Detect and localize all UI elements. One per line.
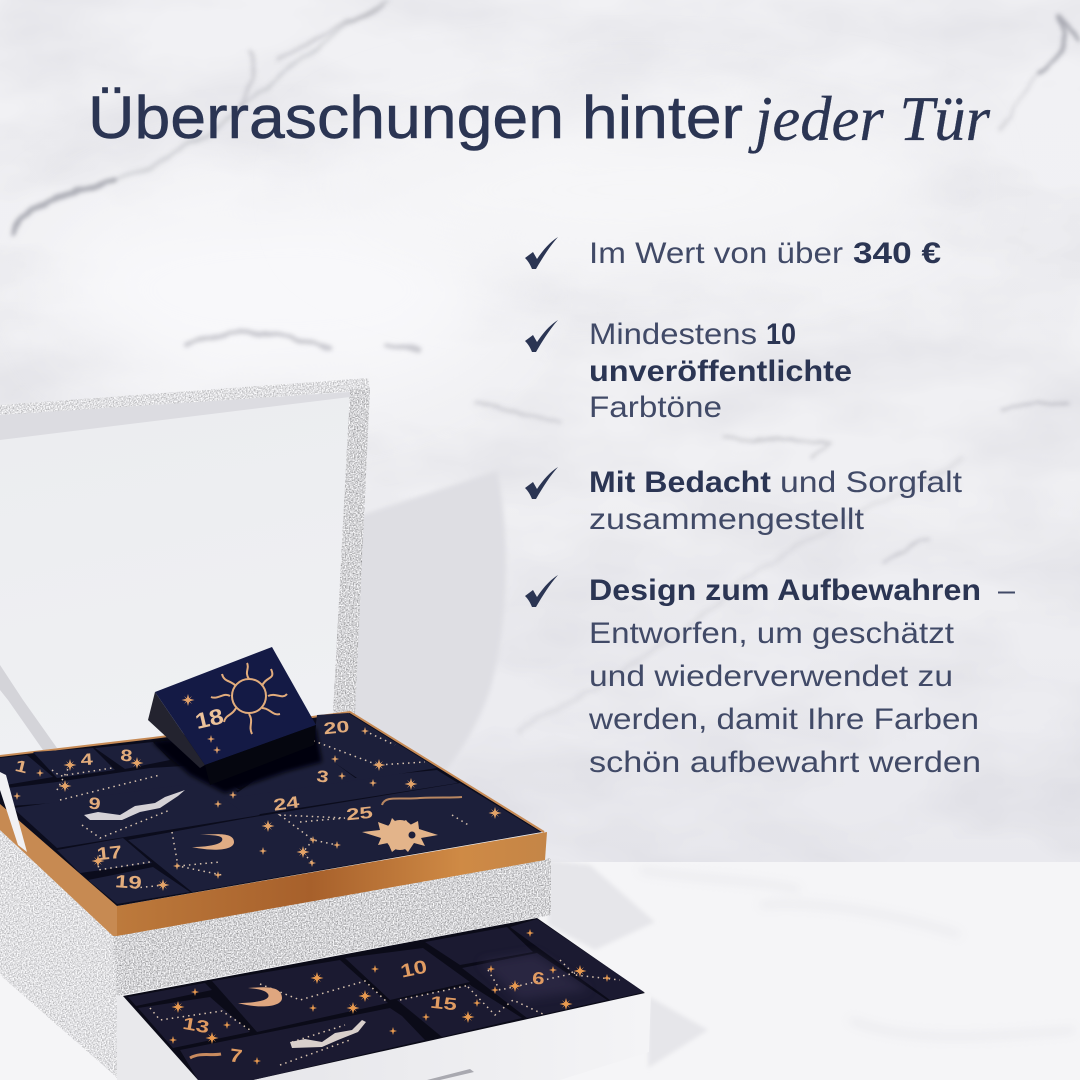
benefit 3: und Sorgfalt <box>780 466 963 499</box>
tray numbers: 24 <box>272 793 301 815</box>
benefit 2 <box>525 318 852 424</box>
tray numbers: 4 <box>80 751 94 770</box>
benefit 1: 340 € <box>853 237 941 270</box>
drawer handle <box>427 1069 474 1080</box>
benefit 2: 10 <box>766 318 796 351</box>
drawer numbers: 10 <box>399 956 429 982</box>
benefit 4: schön aufbewahrt werden <box>589 746 981 779</box>
benefit 3: Mit Bedacht <box>589 466 771 499</box>
benefit 1: Im Wert von über <box>589 237 843 270</box>
benefit 3 <box>525 466 963 536</box>
benefit 2: Mindestens <box>589 318 757 351</box>
drawer stars <box>169 929 611 1065</box>
tray numbers: 3 <box>316 768 330 787</box>
comet <box>382 797 462 805</box>
benefit 1 <box>525 237 941 270</box>
drawer compartments <box>123 918 645 1080</box>
drawer front panel <box>253 992 651 1080</box>
drawer numbers: 6 <box>531 969 545 989</box>
tray numbers: 25 <box>345 803 374 824</box>
drawer highlight <box>480 953 590 1000</box>
title <box>88 83 991 154</box>
white ribbon <box>0 772 27 852</box>
benefit 4: Entworfen, um geschätzt <box>589 617 955 650</box>
drawer numbers: 7 <box>228 1045 243 1067</box>
benefit 2: unveröffentlichte <box>589 355 852 388</box>
benefit 2: Farbtöne <box>589 391 722 424</box>
drawer comet <box>190 1054 221 1058</box>
tray numbers: 20 <box>323 718 350 738</box>
moon <box>192 834 234 850</box>
drawer numbers <box>181 956 545 1067</box>
number 18: 18 <box>193 705 226 735</box>
box left side glitter <box>0 828 117 1078</box>
benefit 4: Design zum Aufbewahren <box>589 574 981 607</box>
check icon <box>525 575 558 607</box>
check icon <box>525 320 558 352</box>
tray numbers: 19 <box>114 872 142 893</box>
drawer sleigh <box>290 1020 366 1048</box>
shadow under open door <box>152 728 322 793</box>
box shadow on table <box>548 860 708 1068</box>
box shadow on wall <box>350 471 506 772</box>
title: Überraschungen hinter <box>88 84 743 151</box>
upper tray of navy doors <box>0 712 544 906</box>
copper rim of upper tray <box>0 803 547 936</box>
tray numbers: 9 <box>88 795 102 814</box>
check icon <box>525 237 558 269</box>
constellations <box>52 731 470 888</box>
drawer numbers: 13 <box>181 1014 211 1037</box>
gift box lid <box>0 378 370 758</box>
sun and moon emblem <box>362 818 438 852</box>
box middle glitter band <box>113 858 551 996</box>
drawer numbers: 15 <box>429 993 458 1015</box>
check icon <box>525 467 558 499</box>
benefit 3: zusammengestellt <box>589 503 865 536</box>
tray stars <box>13 727 502 891</box>
benefit 4: – <box>998 574 1015 607</box>
lower drawer <box>117 918 651 1080</box>
sun emblem <box>211 663 287 734</box>
sleigh <box>84 790 185 820</box>
tray numbers: 8 <box>120 747 133 766</box>
benefit 4: werden, damit Ihre Farben <box>588 703 979 736</box>
drawer constellations <box>150 960 620 1065</box>
tray numbers: 17 <box>96 843 123 865</box>
drawer side panel <box>117 995 198 1080</box>
open door cube 18 <box>148 647 316 785</box>
tray numbers: 1 <box>13 757 29 778</box>
benefit 4 <box>525 574 1015 779</box>
background: marble table <box>0 862 1080 1080</box>
drawer moon <box>238 987 282 1006</box>
tray numbers <box>13 718 374 893</box>
benefit 4: und wiederverwendet zu <box>589 660 953 693</box>
title: jeder Tür <box>748 83 991 154</box>
